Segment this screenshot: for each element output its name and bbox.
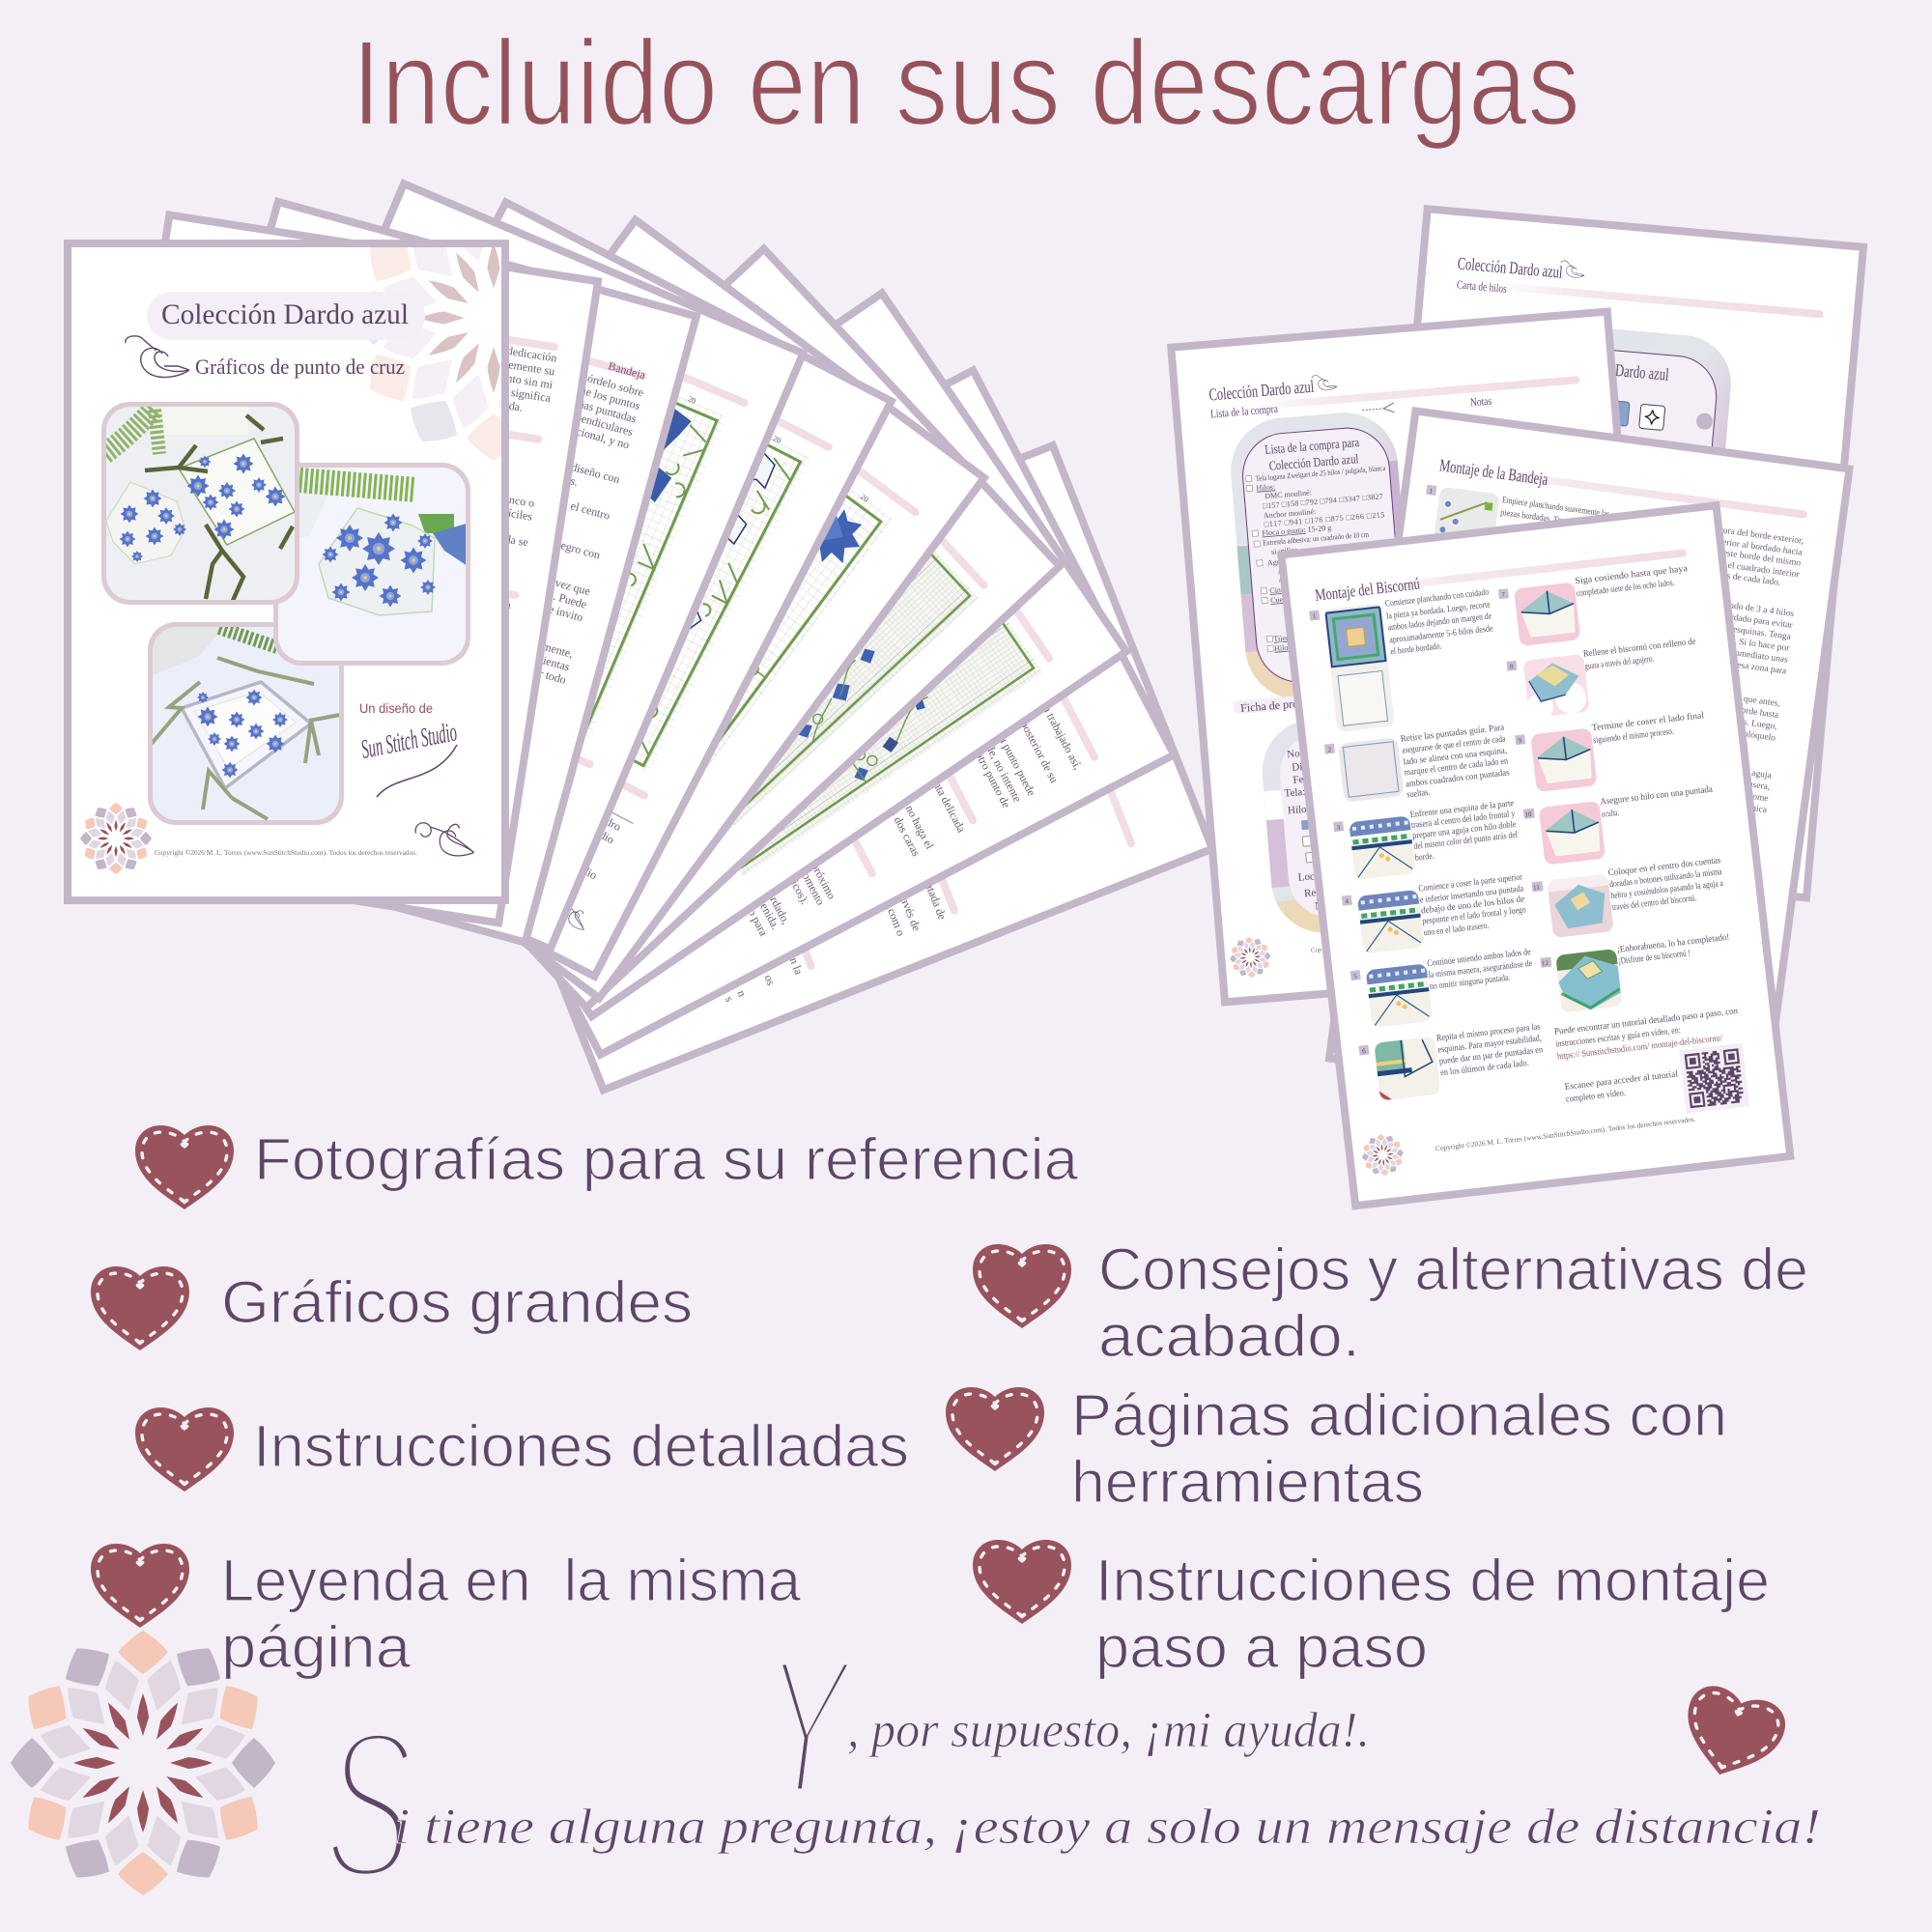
cover credit: Un diseño de bbox=[359, 700, 433, 716]
heading: Colección Dardo azul bbox=[1208, 377, 1315, 405]
shopping list card: Hilos: bbox=[1256, 482, 1275, 493]
page fan 2: bandeja instructions: a vez que bbox=[546, 574, 592, 598]
step 9: Termine de coser el lado final bbox=[1591, 710, 1705, 733]
page fan 9 bbox=[443, 445, 1212, 1090]
page fan 8: cede, no intente bbox=[979, 733, 1024, 805]
page fan 5: chart with large flower: 20 bbox=[859, 493, 870, 504]
step one: Empiece planchando suavemente las bbox=[1501, 496, 1610, 520]
body text right column: esquinas con el cuadrado interior bbox=[1678, 554, 1801, 581]
step 11: Coloque en el centro dos cuentas bbox=[1607, 856, 1721, 878]
page fan 2: bandeja instructions: lmente, bbox=[538, 639, 575, 661]
designer signature: Sun Stitch Studio bbox=[358, 717, 459, 765]
project sheet heading: Ficha de proyecto bbox=[1240, 695, 1323, 715]
step 6: en los últimos de cada lado. bbox=[1440, 1059, 1529, 1078]
step 3: del mismo color del punto atrás del bbox=[1413, 831, 1519, 852]
step 1: la pieza ya bordada. Luego, recorte bbox=[1386, 600, 1491, 622]
step 12: ¡Enhorabuena, lo ha completado! bbox=[1616, 933, 1730, 955]
project sheet card: Localización bbox=[1297, 867, 1353, 884]
step 1: Comienze planchando con cuidado bbox=[1384, 587, 1490, 610]
body text right column: y colóquelo bbox=[1732, 728, 1776, 744]
shopping list card: Anchor mouliné: bbox=[1264, 507, 1317, 520]
sub heading: Lista de la compra bbox=[1210, 402, 1279, 421]
body text right column: inmediato unas bbox=[1732, 648, 1789, 666]
benefit: Leyenda bbox=[91, 1544, 801, 1680]
step 11: hebra y cosiéndolos pasando la aguja a bbox=[1610, 879, 1724, 901]
copyright: Copyright ©2026 M. L. Torres (www.SunStitchStudio.com). Todos los derechos reservados. bbox=[1435, 1115, 1696, 1152]
page fan 8: próximo bbox=[809, 861, 838, 901]
step 2: asegurarse de que el centro de cada bbox=[1402, 734, 1507, 756]
page fan 2: bandeja instructions: Bandeja bbox=[607, 358, 647, 382]
step 12: ¡Disfrute de su biscornú ! bbox=[1618, 948, 1690, 967]
step one bbox=[1420, 485, 1610, 567]
heading: Montaje de la Bandeja bbox=[1438, 455, 1549, 489]
page: lista de la compra bbox=[1171, 312, 1662, 1002]
benefit: Instrucciones de montaje: Instrucciones de montaje bbox=[1095, 1548, 1770, 1613]
step 7 bbox=[1497, 564, 1694, 648]
page fan 1: introduction: ón significa bbox=[496, 384, 553, 405]
shopping list card: Agujas bbox=[1267, 556, 1290, 567]
heading flourish bbox=[1560, 261, 1585, 278]
step one: 1 bbox=[1429, 487, 1434, 496]
body text right column bbox=[1640, 520, 1805, 815]
script line: message: S bbox=[325, 1686, 413, 1923]
step 8: guata a través del agujero. bbox=[1584, 655, 1655, 672]
step 2: lado se alinea con una esquina, bbox=[1403, 746, 1507, 768]
page fan 2: bandeja instructions: puntadas. Bórdelo sobre bbox=[533, 356, 645, 399]
body text right column: Cosa la costura del borde exterior, bbox=[1679, 521, 1804, 547]
page fan 7: blank chart bbox=[347, 294, 1126, 1016]
script line: help: , por supuesto, ¡mi ayuda!. bbox=[847, 1703, 1370, 1758]
heading: Colección Dardo azul bbox=[1457, 253, 1563, 282]
body text right column: de bordado para evitar bbox=[1710, 611, 1794, 631]
shopping list card: Hilo de bbox=[1274, 642, 1298, 653]
shopping list card: Cinta bbox=[1269, 585, 1287, 595]
cover copyright: Copyright ©2026 M. L. Torres (www.SunStitchStudio.com). Todos los derechos reservados. bbox=[155, 850, 417, 857]
step 11: doradas o botones utilizando la misma bbox=[1609, 867, 1723, 890]
heading flourish bbox=[1312, 374, 1337, 391]
step 7: completado siete de los ocho lados. bbox=[1576, 579, 1675, 599]
page fan 9: puntada de bbox=[918, 869, 950, 922]
body text right column: hacia el exterior al bordado hacia bbox=[1681, 532, 1804, 558]
benefit: Páginas adicionales: Páginas adicionales con bbox=[1071, 1382, 1727, 1448]
page fan 8: físicos). bbox=[782, 867, 812, 907]
step 6: 6 bbox=[1362, 1047, 1367, 1055]
page fan 4: chart with outlined flowers: cuadro bbox=[589, 808, 623, 834]
step 5: 5 bbox=[1353, 972, 1358, 980]
thread card: Colección Dardo azul bbox=[1562, 355, 1670, 384]
step 3: Enfrente una esquina de la parte bbox=[1409, 798, 1515, 820]
shopping list card: □117 □941 □176 □875 □266 □215 bbox=[1264, 510, 1385, 528]
step 6: Repita el mismo proceso para las bbox=[1436, 1022, 1541, 1044]
step 4: 4 bbox=[1345, 897, 1350, 905]
page fan 5: chart with large flower bbox=[250, 220, 984, 998]
tutorial text: Puede encontrar un tutorial detallado paso a paso, con bbox=[1554, 1007, 1739, 1037]
cover mandala bbox=[80, 803, 152, 874]
body text right column: Alinearemos este borde del mismo bbox=[1674, 542, 1802, 569]
step 2 bbox=[1324, 723, 1512, 809]
page fan 9: en la bbox=[785, 951, 806, 977]
cover page bbox=[64, 240, 509, 904]
page: carta de hilos bbox=[1371, 209, 1863, 897]
step 1: 1 bbox=[1312, 612, 1317, 620]
shopping list card: Colección Dardo azul bbox=[1268, 451, 1359, 473]
project sheet card: Regalo bbox=[1304, 886, 1335, 899]
page fan 2: bandeja instructions: . . Puede bbox=[546, 587, 588, 611]
shopping list card: Entretela adhesiva: un cuadrado de 10 cm bbox=[1263, 530, 1370, 548]
step 6: puede dar un par de puntadas en bbox=[1438, 1045, 1544, 1066]
page fan 9: a través de bbox=[893, 882, 923, 933]
page fan 8: no para bbox=[743, 901, 771, 939]
page fan 2: bandeja instructions: pequeñas puntadas bbox=[551, 389, 639, 426]
page fan 2: bandeja instructions: el diseño con bbox=[559, 457, 621, 486]
benefit: Consejos: acabado. bbox=[1098, 1303, 1360, 1369]
page fan 8: parte posterior de su bbox=[1006, 696, 1062, 785]
page fan 8: una cinta delicada bbox=[918, 754, 969, 836]
step 4: e inferior insertando una puntada bbox=[1419, 883, 1524, 906]
page fan 3: chart with blue flowers bbox=[151, 184, 803, 949]
step 11: 11 bbox=[1533, 883, 1541, 892]
benefit: Fotografías: Fotografías para su referencia bbox=[254, 1126, 1078, 1192]
page fan 1: introduction: ada se bbox=[499, 531, 529, 549]
shopping list card: si utiliza bbox=[1271, 546, 1298, 556]
step 11: través del centro del biscornú. bbox=[1611, 894, 1697, 913]
step 12: 12 bbox=[1542, 959, 1549, 968]
shopping list card: Tela lugana Zweigart de 25 hilos / pulgada, blanca bbox=[1255, 464, 1386, 483]
script line: help bbox=[763, 1616, 1370, 1837]
step 2: sueltas. bbox=[1406, 788, 1431, 800]
page fan 1: introduction: o. bbox=[497, 610, 507, 625]
shopping list card: Lista de la compra para bbox=[1264, 435, 1360, 457]
page fan 4: chart with outlined flowers: 20 bbox=[772, 434, 782, 445]
step 9 bbox=[1515, 710, 1711, 794]
shopping list card: □157 □158 □792 □794 □3347 □3827 bbox=[1263, 492, 1383, 510]
scissors cut line bbox=[1362, 403, 1395, 415]
step 3: 3 bbox=[1336, 823, 1341, 832]
benefit: Consejos: Consejos y alternativas de bbox=[1098, 1236, 1808, 1302]
page fan 1: introduction: difíciles bbox=[495, 504, 533, 524]
page fan 2: bandeja instructions: adicional, y no bbox=[561, 420, 631, 451]
step 4: Comience a coser la parte superior bbox=[1418, 872, 1523, 895]
page fan 4: chart with outlined flowers: medio bbox=[584, 821, 616, 846]
fan of chart and instruction pages bbox=[71, 184, 1212, 1090]
step 7: 7 bbox=[1501, 591, 1506, 599]
project sheet card: Nombre bbox=[1287, 746, 1322, 760]
step 3: borde. bbox=[1414, 852, 1435, 864]
benefit: Consejos bbox=[973, 1236, 1808, 1369]
step 4: uno en el lado trasero. bbox=[1423, 922, 1490, 938]
page fan 2: bandeja instructions: le invito bbox=[544, 601, 584, 624]
project sheet card: Notas bbox=[1315, 898, 1340, 912]
project sheet card bbox=[1262, 723, 1321, 933]
step 10: oculta. bbox=[1601, 809, 1619, 820]
step 12 bbox=[1540, 933, 1736, 1014]
benefit: Instrucciones de montaje bbox=[973, 1540, 1770, 1680]
body text right column: en las esquinas. Tenga bbox=[1709, 622, 1792, 642]
step 2: 2 bbox=[1327, 746, 1332, 753]
script line: message: i tiene alguna pregunta, ¡estoy a solo un mensaje de distancia! bbox=[394, 1800, 1821, 1855]
page fan 8: el otro punto de bbox=[968, 739, 1013, 810]
step 2: marque el centro de cada lado en bbox=[1404, 756, 1509, 779]
page fan 9: s bbox=[723, 994, 737, 1004]
page fan 8: su punto puede bbox=[994, 729, 1038, 798]
step 9: siguiendo el mismo proceso. bbox=[1593, 727, 1674, 746]
script line: message bbox=[325, 1686, 1821, 1923]
step 1: aproximadamente 5-6 hilos desde bbox=[1389, 624, 1493, 645]
step 2: Retire las puntadas guía. Para bbox=[1400, 723, 1505, 745]
step 7: Siga cosiendo hasta que haya bbox=[1575, 564, 1689, 586]
body text right column: modo que antes, bbox=[1719, 692, 1780, 709]
cover subtitle: Gráficos de punto de cruz bbox=[195, 355, 405, 379]
step 10 bbox=[1523, 785, 1719, 867]
benefit: Instrucciones detalladas bbox=[135, 1407, 909, 1492]
step 4 bbox=[1341, 872, 1529, 955]
benefit: Leyenda: página bbox=[221, 1614, 411, 1680]
page fan 1: introduction bbox=[71, 215, 598, 923]
page fan 9: os bbox=[761, 973, 778, 987]
page fan 8 bbox=[400, 370, 1174, 1055]
mandala bbox=[1228, 935, 1272, 980]
page fan 2: bandeja instructions: porque los puntos bbox=[558, 378, 641, 412]
page fan 4: chart with outlined flowers bbox=[209, 202, 892, 977]
script line: help: Y bbox=[763, 1616, 857, 1837]
project sheet card: Fecha bbox=[1293, 773, 1319, 786]
cover title pill bbox=[147, 292, 425, 340]
page fan 2: bandeja instructions: perpendiculares bbox=[560, 406, 635, 439]
body text right column: tome bbox=[1749, 792, 1769, 804]
shopping list card bbox=[1231, 413, 1401, 697]
step 10: 10 bbox=[1524, 810, 1532, 819]
body text right column: Recorte dejando de 3 a 4 hilos bbox=[1683, 595, 1795, 619]
cover mandala watermark bbox=[369, 247, 501, 461]
page fan 1: introduction: la bbox=[501, 597, 512, 611]
body text right column: la aguja bbox=[1742, 768, 1773, 781]
cover title pill: Colección Dardo azul bbox=[161, 298, 409, 330]
benefit: Páginas adicionales bbox=[946, 1382, 1727, 1515]
step 2: ambos cuadrados con puntadas bbox=[1406, 768, 1510, 789]
benefit: Gráficos bbox=[91, 1266, 693, 1350]
page fan 8: a ha trabajado así, bbox=[1034, 692, 1085, 772]
step 9: 9 bbox=[1518, 737, 1522, 745]
body text right column: s en esa zona para bbox=[1719, 659, 1788, 677]
step 3: prepare una aguja con hilo doble bbox=[1412, 820, 1517, 841]
body text right column: trasera, bbox=[1743, 780, 1771, 792]
tutorial text: instrucciones escritas y guía en vídeo, en: bbox=[1555, 1026, 1681, 1050]
page fan 3: chart with blue flowers: 20 bbox=[687, 394, 697, 406]
step 8: Rellene el biscornú con relleno de bbox=[1583, 638, 1696, 660]
page fan 1: introduction: rda. bbox=[504, 398, 524, 414]
step 4: pespunte en el lado frontal y luego bbox=[1422, 904, 1526, 926]
tutorial text: completo en vídeo. bbox=[1566, 1089, 1626, 1105]
shopping list card: Cuentas bbox=[1270, 594, 1295, 605]
tutorial text bbox=[1554, 1007, 1747, 1105]
page fan 1: introduction: pento sin mi bbox=[495, 369, 554, 391]
title: Incluido en sus descargas bbox=[352, 16, 1580, 151]
project sheet card: Diseño bbox=[1292, 759, 1322, 774]
step 10: Asegure su hilo con una puntada bbox=[1600, 785, 1714, 808]
step 1 bbox=[1309, 587, 1503, 734]
page fan 8: evenida. bbox=[753, 891, 782, 932]
page fan 9: studio.com o bbox=[873, 877, 908, 938]
body text right column: ionica bbox=[1744, 803, 1768, 815]
shopping list card: DMC mouliné: bbox=[1264, 488, 1312, 500]
step 1: el borde bordado. bbox=[1390, 641, 1442, 657]
page fan 2: bandeja instructions bbox=[106, 202, 696, 943]
tutorial text: https:// Sunstitchstudio.com/ montaje-del-biscornu/ bbox=[1557, 1034, 1723, 1062]
project sheet card: Hilos bbox=[1288, 803, 1311, 816]
page fan 1: introduction: o bbox=[497, 624, 505, 639]
page: montaje del biscornu bbox=[1281, 505, 1790, 1206]
cover flourish bbox=[126, 336, 189, 378]
benefit: Gráficos: Gráficos grandes bbox=[221, 1269, 693, 1335]
page fan 1: introduction: blanco o bbox=[495, 491, 535, 510]
step 5: la misma manera, asegurándose de bbox=[1428, 959, 1533, 980]
page fan 8: momento bbox=[795, 863, 828, 907]
step 4: debajo de uno de los hilos de bbox=[1421, 895, 1525, 916]
step 6 bbox=[1358, 1022, 1547, 1102]
step one: piezas bordadas. Tenga cuidado de bbox=[1500, 508, 1608, 532]
step 5 bbox=[1350, 948, 1537, 1030]
notes label: Notas bbox=[1469, 394, 1492, 409]
page fan 8: las dos caras bbox=[884, 800, 923, 859]
page fan 1: introduction: blablemente su bbox=[485, 355, 555, 378]
step 6: esquinas. Para mayor estabilidad, bbox=[1437, 1034, 1542, 1055]
benefit: Instrucciones detalladas: Instrucciones detalladas bbox=[253, 1413, 909, 1479]
cover flourish bottom bbox=[415, 823, 473, 856]
body text right column: en exceso. Si lo hace por bbox=[1698, 632, 1791, 654]
page fan 8: es, no haga el bbox=[895, 789, 937, 852]
page fan 9: n bbox=[734, 988, 750, 999]
step 3 bbox=[1333, 798, 1520, 882]
benefit: Fotografías bbox=[135, 1125, 1078, 1209]
thread card bbox=[1542, 325, 1735, 618]
project sheet card: Tela: bbox=[1284, 786, 1306, 800]
body text right column: che. bbox=[1723, 670, 1740, 682]
step 8: 8 bbox=[1510, 663, 1515, 670]
page fan 1: introduction: y dedicación bbox=[497, 342, 557, 365]
step 8 bbox=[1507, 638, 1695, 716]
shopping list card: Floca o guata: 15-20 g bbox=[1262, 524, 1332, 538]
step 5: Continúe uniendo ambos lados de bbox=[1427, 948, 1531, 969]
heading: Montaje del Biscornú bbox=[1314, 575, 1421, 605]
icon: tilted heart bbox=[1672, 1680, 1791, 1789]
photo 1: tray and biscornu bbox=[100, 400, 303, 609]
copyright: Copyright ©2026 M. L. Torres (www.SunStitchStudio.com). Todos los derechos reservados. bbox=[1311, 927, 1553, 954]
page fan 2: bandeja instructions: an el centro bbox=[555, 496, 611, 523]
tutorial text: Escanee para acceder al tutorial bbox=[1564, 1069, 1679, 1093]
step 3: trasera al centro del lado frontal y bbox=[1410, 809, 1516, 831]
page fan 6: chart with flowers bbox=[291, 249, 1060, 1008]
shopping list card: Aguja bbox=[1277, 565, 1297, 575]
mandala bbox=[1359, 1132, 1406, 1179]
page fan 2: bandeja instructions: er todo bbox=[532, 665, 568, 687]
QR code bbox=[1679, 1043, 1749, 1114]
photo 2: biscornu bbox=[270, 460, 473, 668]
body text right column: adas. Luego, bbox=[1730, 716, 1777, 732]
step 11 bbox=[1531, 856, 1728, 940]
page: montaje de la bandeja bbox=[1329, 411, 1849, 1116]
page fan 2: bandeja instructions: principales. bbox=[525, 462, 580, 489]
photo 3: tray from above bbox=[145, 618, 348, 831]
benefit: Leyenda: Leyenda en la misma bbox=[221, 1548, 801, 1613]
large mandala bbox=[11, 1631, 275, 1895]
designer signature bbox=[358, 717, 459, 797]
shopping list card: Tijeras bbox=[1273, 633, 1295, 643]
page fan 2: bandeja instructions: negro con bbox=[554, 536, 602, 562]
shopping list card: Aguja bbox=[1278, 574, 1298, 583]
body text right column: del borde hasta bbox=[1722, 703, 1779, 721]
step 5: no omitir ninguna puntada. bbox=[1430, 974, 1511, 992]
benefit: Páginas adicionales: herramientas bbox=[1071, 1449, 1424, 1515]
body text right column: puntos azuls de cada lado. bbox=[1685, 566, 1781, 588]
page fan 2: bandeja instructions: mientas bbox=[533, 651, 572, 673]
page fan 4: chart with outlined flowers: dio bbox=[580, 864, 599, 882]
page fan 8: bordado, bbox=[762, 884, 793, 926]
sub heading: Carta de hilos bbox=[1456, 277, 1508, 296]
step 1: ambos lados dejando un margen de bbox=[1387, 611, 1492, 633]
benefit: Instrucciones de montaje: paso a paso bbox=[1095, 1614, 1428, 1680]
